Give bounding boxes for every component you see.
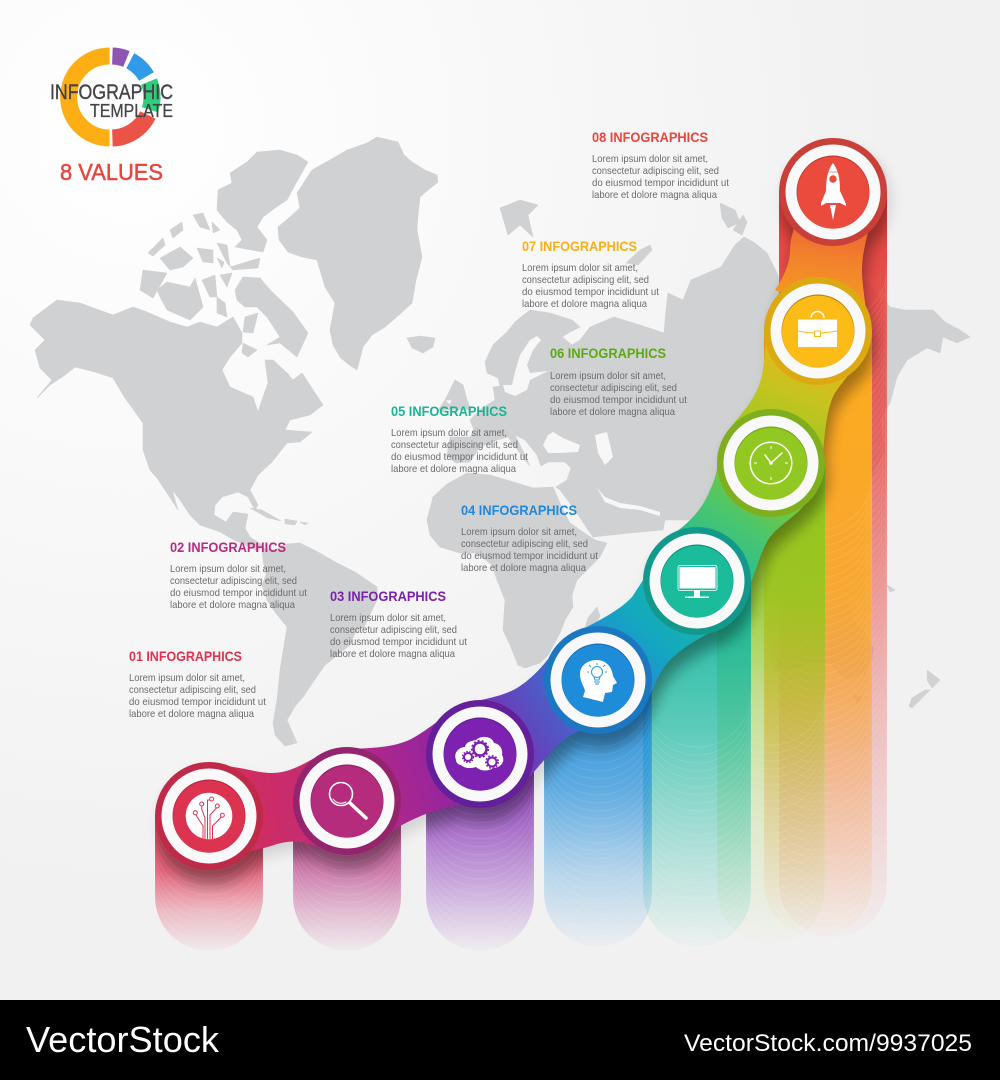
text block 06 [550, 345, 687, 418]
text block 03: consectetur adipiscing elit, sed [330, 624, 457, 636]
text block 08: consectetur adipiscing elit, sed [592, 165, 719, 177]
icon: magnifier [330, 782, 366, 818]
text block 07: labore et dolore magna aliqua [522, 298, 647, 310]
map: Caribbean [250, 508, 308, 525]
text block 08: 08 INFOGRAPHICS [592, 129, 708, 145]
text block 05: 05 INFOGRAPHICS [391, 403, 507, 419]
text block 07: consectetur adipiscing elit, sed [522, 274, 649, 286]
map: Southeast Asia islands [770, 530, 895, 604]
text block 08: Lorem ipsum dolor sit amet, [592, 153, 708, 165]
icon: briefcase [798, 312, 837, 347]
column 7 [764, 331, 872, 938]
logo ring segments [69, 56, 152, 138]
node 4 [544, 626, 652, 734]
logo text INFOGRAPHIC: INFOGRAPHIC [50, 80, 173, 104]
text block 02: Lorem ipsum dolor sit amet, [170, 563, 286, 575]
text block 07: 07 INFOGRAPHICS [522, 238, 637, 254]
logo text 8 VALUES: 8 VALUES [60, 159, 163, 185]
map: North America [30, 300, 323, 552]
text block 07: do eiusmod tempor incididunt ut [522, 286, 659, 298]
node 2 [293, 747, 401, 855]
footer logo text: VectorStock [26, 1019, 220, 1060]
column 4 [544, 680, 652, 947]
text block 05: labore et dolore magna aliqua [391, 463, 516, 475]
map: Africa [427, 473, 607, 668]
text block 04: Lorem ipsum dolor sit amet, [461, 526, 577, 538]
logo text TEMPLATE: TEMPLATE [90, 101, 173, 121]
text block 06: do eiusmod tempor incididunt ut [550, 394, 687, 406]
text block 05: Lorem ipsum dolor sit amet, [391, 427, 507, 439]
node 5 [643, 527, 751, 635]
map: Arctic islands [140, 150, 308, 357]
map: Madagascar [584, 607, 600, 636]
text block 04 [461, 502, 598, 574]
text block 03 [330, 588, 467, 660]
icon: monitor [678, 566, 717, 598]
text block 06: consectetur adipiscing elit, sed [550, 382, 677, 394]
icon: circuit tree [186, 793, 232, 839]
map: Eurasia [447, 237, 970, 590]
text block 06: Lorem ipsum dolor sit amet, [550, 370, 666, 382]
column 2 [293, 697, 401, 951]
text block 02: labore et dolore magna aliqua [170, 599, 295, 611]
ribbon shadow [157, 146, 891, 886]
text block 03: 03 INFOGRAPHICS [330, 588, 446, 604]
text block 02 [170, 539, 307, 611]
footer url text: VectorStock.com/9937025 [684, 1030, 972, 1057]
column 1 [155, 697, 263, 951]
map: Iceland, Britain and Arctic Russia [407, 200, 747, 412]
world map [30, 137, 970, 746]
icon: cloud with gears [455, 737, 503, 771]
node 7 [764, 277, 872, 385]
text block 01: 01 INFOGRAPHICS [129, 648, 242, 664]
text block 07 [522, 238, 659, 310]
column 3 [426, 697, 534, 951]
map: South America [262, 543, 377, 746]
text block 04: 04 INFOGRAPHICS [461, 502, 577, 518]
text block 08: do eiusmod tempor incididunt ut [592, 177, 729, 189]
map: inland seas [503, 336, 660, 516]
text block 01: labore et dolore magna aliqua [129, 708, 254, 720]
text block 05: consectetur adipiscing elit, sed [391, 439, 518, 451]
map: Greenland [278, 137, 438, 370]
text block 07: Lorem ipsum dolor sit amet, [522, 262, 638, 274]
text block 04: do eiusmod tempor incididunt ut [461, 550, 598, 562]
text block 05: do eiusmod tempor incididunt ut [391, 451, 528, 463]
column 5 [643, 581, 751, 947]
text block 06: 06 INFOGRAPHICS [550, 345, 666, 361]
text block 06: labore et dolore magna aliqua [550, 406, 675, 418]
icon: head with light bulb [580, 660, 617, 702]
text block 03: labore et dolore magna aliqua [330, 648, 455, 660]
node 1 [155, 762, 263, 870]
node 6 [717, 409, 825, 517]
gradient ribbon [226, 225, 870, 852]
text block 01 [129, 648, 266, 720]
fading columns [155, 192, 887, 951]
text block 02: do eiusmod tempor incididunt ut [170, 587, 307, 599]
icon: rocket [821, 163, 846, 220]
text block 03: Lorem ipsum dolor sit amet, [330, 612, 446, 624]
text block 08: labore et dolore magna aliqua [592, 189, 717, 201]
text blocks [129, 129, 729, 720]
node 3 [426, 700, 534, 808]
text block 08 [592, 129, 729, 201]
logo: donut chart and title [50, 56, 173, 185]
footer bar [0, 1000, 1000, 1080]
text block 04: labore et dolore magna aliqua [461, 562, 586, 574]
text block 01: Lorem ipsum dolor sit amet, [129, 672, 245, 684]
node 8 [779, 138, 887, 246]
text block 04: consectetur adipiscing elit, sed [461, 538, 588, 550]
text block 01: do eiusmod tempor incididunt ut [129, 696, 266, 708]
text block 05 [391, 403, 528, 475]
map: Australia and New Zealand [770, 577, 940, 708]
icon: clock [750, 442, 792, 484]
column 8 [779, 192, 887, 938]
text block 01: consectetur adipiscing elit, sed [129, 684, 256, 696]
column 6 [717, 463, 825, 945]
text block 03: do eiusmod tempor incididunt ut [330, 636, 467, 648]
text block 02: 02 INFOGRAPHICS [170, 539, 286, 555]
text block 02: consectetur adipiscing elit, sed [170, 575, 297, 587]
